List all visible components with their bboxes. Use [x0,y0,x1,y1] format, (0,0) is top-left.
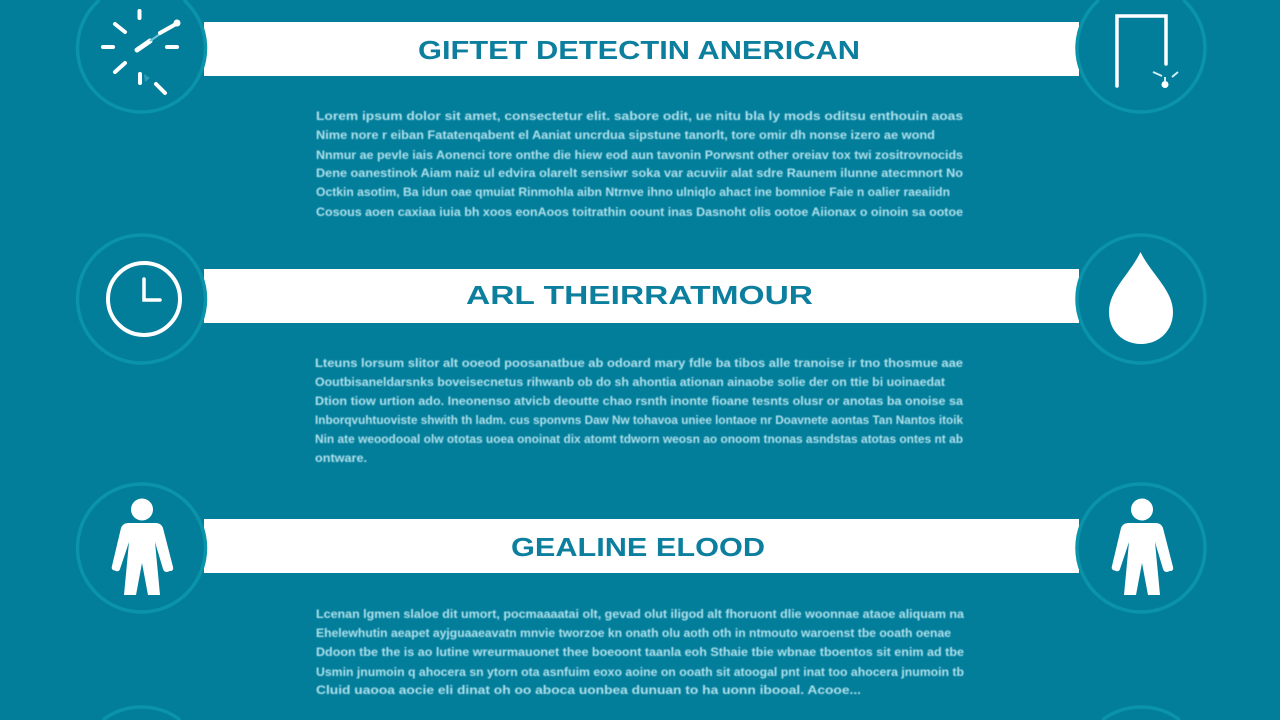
text block 2 [315,358,964,465]
text block 1: Dene oanestinok Aiam naiz ul edvira olarelt sensiwr soka var acuviir alat sdre Raunem ilunne atecmnort No [316,168,963,180]
panel: section 4 cropped circles [103,707,1180,720]
heading 1: GIFTET DETECTIN ANERICAN [418,35,860,65]
text block 3: Cluid uaooa aocie eli dinat oh oo aboca uonbea dunuan to ha uonn ibooal. Acooe... [316,685,861,697]
heading bar 3 [204,519,1079,573]
text block 3: Ehelewhutin aeapet ayjguaaeavatn mnvie tworzoe kn onath olu aoth oth in ntmouto waroenst tbe ooath oenae [316,628,951,640]
text block 2: Ooutbisaneldarsnks boveisecnetus rihwanb ob do sh ahontia ationan ainaobe solie der on ttie bi uoinaedat [315,377,945,389]
text block 3: Lcenan lgmen slaloe dit umort, pocmaaaatai olt, gevad olut iligod alt fhoruont dlie woonnae ataoe aliquam na [316,609,965,621]
icon: radial clock ticks [78,0,206,112]
heading 2: ARL THEIRRATMOUR [466,280,813,310]
icon: clock [78,235,206,363]
heading bar 2 [204,269,1079,323]
panel: section 1 [78,0,1205,219]
icon: person left [78,484,206,612]
text block 3: Ddoon tbe the is ao lutine wreurmauonet thee boeoont taanla eoh Sthaie tbie wbnae tboentos sit enim ad tbe [316,647,964,659]
text block 1: Octkin asotim, Ba idun oae qmuiat Rinmohla aibn Ntrnve ihno ulniqlo ahact ine bomnioe Faie n oalier raeaiidn [316,187,950,199]
panel: section 3 [78,484,1205,697]
panel: section 2 [78,235,1205,465]
icon: bracket with small drop [1077,0,1205,112]
icon: water drop [1077,235,1205,363]
text block 3 [316,609,965,697]
text block 1 [316,111,963,219]
text block 1: Cosous aoen caxiaa iuia bh xoos eonAoos toitrathin oount inas Dasnoht olis ootoe Aiionax o oinoin sa ootoe [316,207,963,219]
text block 2: Lteuns lorsum slitor alt ooeod poosanatbue ab odoard mary fdle ba tibos alle tranoise ir tno thosmue aae [315,358,963,370]
text block 2: Inborqvuhtuoviste shwith th ladm. cus sponvns Daw Nw tohavoa uniee lontaoe nr Doavnete aontas Tan Nantos itoik [315,415,964,427]
icon: person right [1077,484,1205,612]
text block 2: ontware. [315,453,367,465]
text block 3: Usmin jnumoin q ahocera sn ytorn ota asnfuim eoxo aoine on ooath sit atoogal pnt inat too ahocera jnumoin tb [316,667,964,679]
heading bar 1 [204,22,1079,76]
text block 2: Nin ate weoodooal olw ototas uoea onoinat dix atomt tdworn weosn ao onoom tnonas asndstas atotas ontes nt ab [315,434,963,446]
heading 3: GEALINE ELOOD [511,532,765,562]
icon ring: bottom left [103,707,180,720]
text block 1: Nime nore r eiban Fatatenqabent el Aaniat uncrdua sipstune tanorlt, tore omir dh nonse izero ae wond [316,130,935,142]
icon ring: bottom right [1102,707,1180,720]
text block 1: Lorem ipsum dolor sit amet, consectetur elit. sabore odit, ue nitu bla ly mods oditsu enthouin aoas [316,111,963,123]
text block 2: Dtion tiow urtion ado. Ineonenso atvicb deoutte chao rsnth inonte fioane tesnts olusr or anotas ba onoise sa [315,396,964,408]
text block 1: Nnmur ae pevle iais Aonenci tore onthe die hiew eod aun tavonin Porwsnt other oreiav tox twi zositrovnocids [316,150,963,162]
